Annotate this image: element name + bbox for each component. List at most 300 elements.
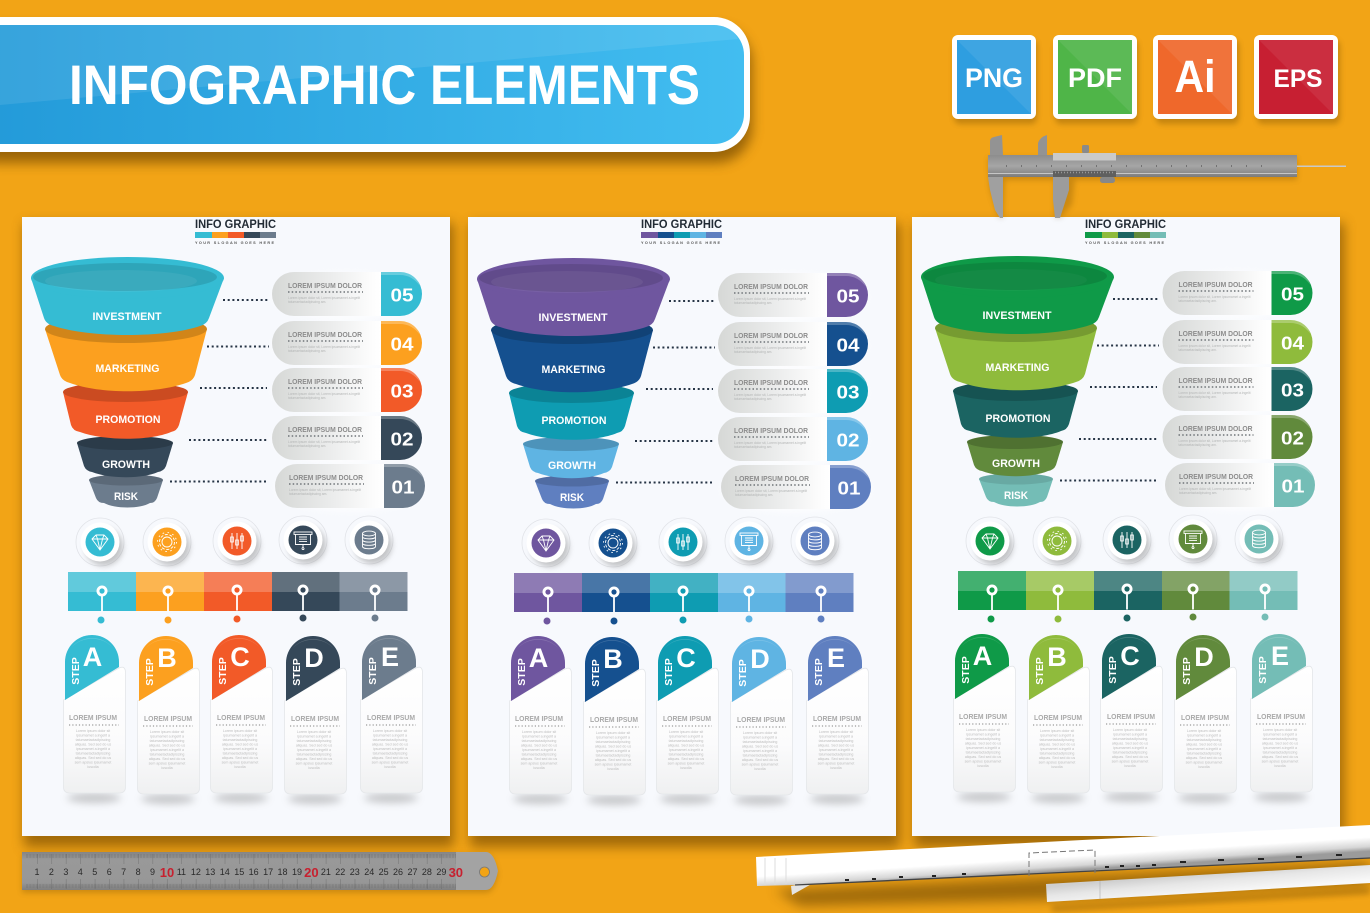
funnel layer: investment xyxy=(477,258,670,336)
icon: diamond xyxy=(522,519,570,567)
funnel layer: risk xyxy=(89,474,163,508)
step card B: Lorem ipsum dolor sit xyxy=(1040,729,1074,733)
funnel layer: growth: GROWTH xyxy=(102,459,150,471)
step card B: ipsumamet a.ingelit a xyxy=(596,749,630,753)
funnel layer: risk: RISK xyxy=(1004,490,1028,502)
step card B xyxy=(138,636,200,804)
label pill 05 xyxy=(272,272,422,320)
sheet title: INFO GRAPHIC xyxy=(1085,217,1166,231)
label pill 02: tatumaetactadipiscing am. xyxy=(288,444,326,448)
step card E: sem apsius ipsumamet xyxy=(818,762,854,766)
step card E: sem apsius ipsumamet xyxy=(372,760,408,764)
step card E: ipsumamet a.ingelit a xyxy=(1263,732,1297,736)
label pill 02: 02 xyxy=(1281,428,1304,448)
step card B: aliquas. Sed sed do us xyxy=(1039,756,1075,760)
step card A: ipsumamet a.ingelit a xyxy=(522,748,556,752)
icon: coin stack xyxy=(791,517,839,565)
step card D: D xyxy=(1194,642,1214,672)
label pill 02 xyxy=(718,417,868,465)
step card E: STEP xyxy=(367,657,379,685)
step card B: LOREM IPSUM xyxy=(1034,713,1082,722)
ruler: 16 xyxy=(249,867,259,877)
step card E: ipsumamet a.ingelit a xyxy=(819,748,853,752)
step card C: aliquas. Sed sed do us xyxy=(222,756,258,760)
label pill 01: LOREM IPSUM DOLOR xyxy=(289,475,363,482)
label pill 03: Lorem ipsum dolor sit, Lorem ipsumamet a.ingelit xyxy=(1178,391,1251,395)
step card D xyxy=(1174,635,1236,803)
step card A xyxy=(510,636,572,804)
step card D: sem apsius ipsumamet xyxy=(742,762,778,766)
step card C: sem apsius ipsumamet xyxy=(1112,760,1148,764)
step card C: iuscdia xyxy=(680,766,692,770)
label pill 03: LOREM IPSUM DOLOR xyxy=(288,379,362,386)
step card D: STEP xyxy=(737,659,749,687)
badge: PDF xyxy=(1053,35,1138,124)
step card B: aliquas. Sed sed do us xyxy=(1039,742,1075,746)
funnel chart xyxy=(31,257,224,508)
dotted connectors xyxy=(170,300,269,482)
label pill 03: 03 xyxy=(390,382,414,402)
funnel layer: promotion xyxy=(953,381,1078,438)
step card A: STEP xyxy=(516,658,528,686)
icon: presentation board xyxy=(725,517,773,565)
step card A: ipsumamet a.ingelit a xyxy=(966,746,1000,750)
step card E: STEP xyxy=(813,658,825,686)
step card A: sem apsius ipsumamet xyxy=(521,762,557,766)
step card D: ipsumamet a.ingelit a xyxy=(743,749,777,753)
step card D: tatumaetactadipiscing xyxy=(297,752,331,756)
badge: EPS: EPS xyxy=(1274,65,1322,93)
funnel layer: growth xyxy=(967,435,1063,476)
funnel layer: investment xyxy=(31,257,224,335)
label pill 04: LOREM IPSUM DOLOR xyxy=(1178,331,1252,338)
step card D: tatumaetactadipiscing xyxy=(743,740,777,744)
ruler: 29 xyxy=(436,867,446,877)
label pill 01: LOREM IPSUM DOLOR xyxy=(1179,474,1253,481)
ruler: 25 xyxy=(379,867,389,877)
step card E: Lorem ipsum dolor sit xyxy=(819,730,853,734)
ruler: 17 xyxy=(263,867,273,877)
step card A: LOREM IPSUM xyxy=(959,712,1007,721)
step card D: aliquas. Sed sed do us xyxy=(742,744,778,748)
step card A: iuscdia xyxy=(977,764,989,768)
step card B: aliquas. Sed sed do us xyxy=(595,758,631,762)
step card D: ipsumamet a.ingelit a xyxy=(297,734,331,738)
label pill 03: tatumaetactadipiscing am. xyxy=(288,396,326,400)
badge: PDF: PDF xyxy=(1068,63,1122,93)
ruler: 22 xyxy=(335,867,345,877)
sheet title: INFO GRAPHIC xyxy=(641,217,722,231)
step card C: ipsumamet a.ingelit a xyxy=(223,734,257,738)
icon: presentation board xyxy=(1169,515,1217,563)
step card B: iuscdia xyxy=(607,767,619,771)
label pill 04: Lorem ipsum dolor sit, Lorem ipsumamet a.ingelit xyxy=(1178,344,1251,348)
step card E: E xyxy=(827,643,845,673)
step card B: Lorem ipsum dolor sit xyxy=(596,731,630,735)
step card C: ipsumamet a.ingelit a xyxy=(223,747,257,751)
step card A: aliquas. Sed sed do us xyxy=(521,744,557,748)
step card A: A xyxy=(529,643,548,673)
sheet title xyxy=(641,217,722,245)
ruler: 13 xyxy=(205,867,215,877)
ruler: 21 xyxy=(321,867,331,877)
step card C: LOREM IPSUM xyxy=(663,714,711,723)
label pill 05: LOREM IPSUM DOLOR xyxy=(288,283,362,290)
step card E: aliquas. Sed sed do us xyxy=(372,756,408,760)
step card C: LOREM IPSUM xyxy=(1107,712,1155,721)
step card E: sem apsius ipsumamet xyxy=(1262,760,1298,764)
funnel layer: growth xyxy=(77,436,173,477)
step card E: tatumaetactadipiscing xyxy=(1263,737,1297,741)
step card B: tatumaetactadipiscing xyxy=(596,754,630,758)
label pill 02: tatumaetactadipiscing am. xyxy=(1178,443,1217,447)
step card C: tatumaetactadipiscing xyxy=(1113,737,1147,741)
funnel layer: growth xyxy=(523,437,619,478)
step card D: aliquas. Sed sed do us xyxy=(296,757,332,761)
label pill 04: Lorem ipsum dolor sit, Lorem ipsumamet a.ingelit xyxy=(734,346,806,350)
step card E: ipsumamet a.ingelit a xyxy=(1263,746,1297,750)
panel: right funnel sheet xyxy=(912,217,1344,847)
label pill 01 xyxy=(1165,463,1315,511)
step card A: aliquas. Sed sed do us xyxy=(965,755,1001,759)
label pill 05: 05 xyxy=(390,286,414,306)
step card D: ipsumamet a.ingelit a xyxy=(1187,734,1221,738)
label pill 01: 01 xyxy=(838,478,860,498)
label pill 02: tatumaetactadipiscing am. xyxy=(734,445,772,449)
step card B: sem apsius ipsumamet xyxy=(595,762,631,766)
label pill 02: Lorem ipsum dolor sit, Lorem ipsumamet a.ingelit xyxy=(1178,439,1251,443)
step card B xyxy=(1028,635,1090,803)
step card D: D xyxy=(750,644,770,674)
step card B: iuscdia xyxy=(1051,765,1063,769)
label pill 05: Lorem ipsum dolor sit, Lorem ipsumamet a.ingelit xyxy=(1178,295,1251,299)
funnel layer: promotion xyxy=(63,382,188,439)
step card D: aliquas. Sed sed do us xyxy=(742,758,778,762)
step card E: LOREM IPSUM xyxy=(1257,712,1305,721)
sheet title: YOUR SLOGAN GOES HERE xyxy=(195,241,274,245)
step card A: LOREM IPSUM xyxy=(515,714,563,723)
step card C: aliquas. Sed sed do us xyxy=(222,742,258,746)
step card A: A xyxy=(83,642,102,672)
label pill 01: 01 xyxy=(392,478,414,498)
step card E: iuscdia xyxy=(1274,764,1286,768)
step card C: tatumaetactadipiscing xyxy=(1113,750,1147,754)
step card C: aliquas. Sed sed do us xyxy=(1112,742,1148,746)
step card A: ipsumamet a.ingelit a xyxy=(76,734,110,738)
ruler: 10 xyxy=(160,865,174,880)
sheet title xyxy=(195,217,276,245)
ruler: 26 xyxy=(393,867,403,877)
step card E: aliquas. Sed sed do us xyxy=(372,742,408,746)
step card C: iuscdia xyxy=(1124,764,1136,768)
label pill 02: LOREM IPSUM DOLOR xyxy=(1178,426,1252,433)
step card E xyxy=(1250,634,1312,802)
rolled paper xyxy=(756,825,1370,912)
step card C: C xyxy=(1120,641,1140,671)
step card E: tatumaetactadipiscing xyxy=(373,752,407,756)
label pill 02 xyxy=(1162,415,1312,463)
label pill 05: tatumaetactadipiscing am. xyxy=(734,301,772,305)
step card E: E xyxy=(381,642,399,672)
label pill 04 xyxy=(272,321,422,369)
dotted connectors xyxy=(1060,299,1159,480)
step card C: STEP xyxy=(663,658,675,686)
funnel layer: promotion: PROMOTION xyxy=(96,414,161,426)
label pill 05: Lorem ipsum dolor sit, Lorem ipsumamet a.ingelit xyxy=(288,296,360,300)
timeline bar xyxy=(514,573,854,624)
label pill 05: 05 xyxy=(836,286,860,306)
step card E: STEP xyxy=(1257,656,1269,684)
step card E: tatumaetactadipiscing xyxy=(373,738,407,742)
label pill 01: tatumaetactadipiscing am. xyxy=(1179,491,1217,495)
ruler: 2 xyxy=(49,867,54,877)
timeline bar xyxy=(958,571,1298,622)
label pill 01: Lorem ipsum dolor sit, Lorem ipsumamet a.ingelit xyxy=(289,488,361,492)
step card A: sem apsius ipsumamet xyxy=(75,760,111,764)
step card D: tatumaetactadipiscing xyxy=(1187,752,1221,756)
funnel layer: investment: INVESTMENT xyxy=(982,310,1052,322)
label pill 03: 03 xyxy=(836,382,860,402)
step card A: ipsumamet a.ingelit a xyxy=(76,747,110,751)
caliper xyxy=(988,135,1346,218)
label pill 03 xyxy=(718,369,868,417)
label pill 05: tatumaetactadipiscing am. xyxy=(1178,299,1217,303)
label pill 04: tatumaetactadipiscing am. xyxy=(288,349,326,353)
badge: Ai xyxy=(1153,35,1239,124)
label pill 03: tatumaetactadipiscing am. xyxy=(734,397,772,401)
label pill 01 xyxy=(275,464,425,512)
panel: left funnel sheet xyxy=(22,217,454,847)
step card B: STEP xyxy=(1034,657,1046,685)
ruler: 4 xyxy=(78,867,83,877)
step card D: aliquas. Sed sed do us xyxy=(1186,756,1222,760)
step card E: LOREM IPSUM xyxy=(813,714,861,723)
funnel layer: promotion xyxy=(509,383,634,440)
step card E: ipsumamet a.ingelit a xyxy=(819,734,853,738)
label pill 04 xyxy=(718,322,868,370)
funnel layer: promotion: PROMOTION xyxy=(986,413,1051,425)
step card C: ipsumamet a.ingelit a xyxy=(1113,732,1147,736)
icon: coin stack xyxy=(345,516,393,564)
ruler: 1 xyxy=(34,867,40,877)
label pill 04: LOREM IPSUM DOLOR xyxy=(734,333,808,340)
step card D: Lorem ipsum dolor sit xyxy=(743,731,777,735)
step card C: tatumaetactadipiscing xyxy=(669,739,703,743)
step card E xyxy=(806,636,868,804)
label pill 01 xyxy=(721,465,871,513)
step card B: tatumaetactadipiscing xyxy=(150,739,184,743)
sheet title: YOUR SLOGAN GOES HERE xyxy=(1085,241,1164,245)
step card D: tatumaetactadipiscing xyxy=(1187,738,1221,742)
icon: diamond xyxy=(76,518,124,566)
step card D: D xyxy=(304,643,324,673)
step card A: ipsumamet a.ingelit a xyxy=(966,732,1000,736)
label pill 03 xyxy=(1162,367,1312,415)
step card E: ipsumamet a.ingelit a xyxy=(373,747,407,751)
funnel layer: marketing: MARKETING xyxy=(986,362,1050,374)
ruler: 24 xyxy=(364,867,374,877)
step card C: Lorem ipsum dolor sit xyxy=(223,729,257,733)
step card D: STEP xyxy=(1181,657,1193,685)
step card D: Lorem ipsum dolor sit xyxy=(297,730,331,734)
step card B: Lorem ipsum dolor sit xyxy=(150,730,184,734)
step card E: aliquas. Sed sed do us xyxy=(818,757,854,761)
label pill 02: Lorem ipsum dolor sit, Lorem ipsumamet a.ingelit xyxy=(288,440,360,444)
heading: infographic elements: INFOGRAPHIC ELEMENTS xyxy=(69,53,700,116)
step card E: tatumaetactadipiscing xyxy=(819,739,853,743)
funnel chart xyxy=(477,258,670,508)
ruler: 12 xyxy=(191,867,201,877)
header banner xyxy=(0,17,752,163)
label pill 04: Lorem ipsum dolor sit, Lorem ipsumamet a.ingelit xyxy=(288,345,360,349)
step card C: Lorem ipsum dolor sit xyxy=(1113,728,1147,732)
step card A: iuscdia xyxy=(533,766,545,770)
step card B: ipsumamet a.ingelit a xyxy=(150,748,184,752)
step card A: aliquas. Sed sed do us xyxy=(75,756,111,760)
sheet title: INFO GRAPHIC xyxy=(195,217,276,231)
step card C: C xyxy=(230,642,250,672)
step card D: tatumaetactadipiscing xyxy=(297,739,331,743)
step card B: tatumaetactadipiscing xyxy=(150,752,184,756)
step card A xyxy=(64,635,126,803)
label pill 05: 05 xyxy=(1281,284,1304,304)
step card B: B xyxy=(603,644,623,674)
label pill 04: 04 xyxy=(836,336,860,356)
dotted connectors xyxy=(616,301,715,482)
step card C: STEP xyxy=(217,657,229,685)
step card A: iuscdia xyxy=(87,765,99,769)
label pill 04: LOREM IPSUM DOLOR xyxy=(288,332,362,339)
panel: middle funnel sheet xyxy=(468,217,900,847)
funnel layer: marketing xyxy=(45,315,207,391)
label pill 03: Lorem ipsum dolor sit, Lorem ipsumamet a.ingelit xyxy=(288,392,360,396)
step card A: Lorem ipsum dolor sit xyxy=(522,730,556,734)
step card A: aliquas. Sed sed do us xyxy=(75,742,111,746)
step card E: E xyxy=(1271,641,1289,671)
step card B: ipsumamet a.ingelit a xyxy=(150,734,184,738)
label pill 02: 02 xyxy=(836,430,860,450)
funnel layer: marketing: MARKETING xyxy=(96,363,160,375)
step card A: ipsumamet a.ingelit a xyxy=(522,734,556,738)
step card C: aliquas. Sed sed do us xyxy=(668,744,704,748)
step card D: LOREM IPSUM xyxy=(737,715,785,724)
step card C: STEP xyxy=(1107,656,1119,684)
badge: EPS xyxy=(1254,35,1340,124)
step card C: tatumaetactadipiscing xyxy=(223,738,257,742)
funnel chart xyxy=(921,256,1114,506)
label pill 03: 03 xyxy=(1281,380,1304,400)
ruler: 8 xyxy=(136,867,141,877)
step card E: ipsumamet a.ingelit a xyxy=(373,734,407,738)
step card E: LOREM IPSUM xyxy=(367,713,415,722)
label pill 05: tatumaetactadipiscing am. xyxy=(288,300,326,304)
icon: gear xyxy=(143,518,191,566)
step card A: tatumaetactadipiscing xyxy=(966,750,1000,754)
step card B: B xyxy=(157,643,177,673)
step card C: aliquas. Sed sed do us xyxy=(1112,755,1148,759)
step card A: tatumaetactadipiscing xyxy=(76,752,110,756)
step card D: iuscdia xyxy=(754,767,766,771)
step card A: STEP xyxy=(960,656,972,684)
step card B: tatumaetactadipiscing xyxy=(596,740,630,744)
label pill 03: Lorem ipsum dolor sit, Lorem ipsumamet a.ingelit xyxy=(734,393,806,397)
funnel layer: marketing xyxy=(935,314,1097,390)
sheet title: YOUR SLOGAN GOES HERE xyxy=(641,241,720,245)
step card E: Lorem ipsum dolor sit xyxy=(1263,728,1297,732)
step card A: tatumaetactadipiscing xyxy=(522,752,556,756)
label pill 02: LOREM IPSUM DOLOR xyxy=(734,428,808,435)
step card B: sem apsius ipsumamet xyxy=(1039,760,1075,764)
badge: PNG xyxy=(952,35,1037,124)
step card B: ipsumamet a.ingelit a xyxy=(1040,734,1074,738)
step card B: aliquas. Sed sed do us xyxy=(149,757,185,761)
step card A: sem apsius ipsumamet xyxy=(965,760,1001,764)
label pill 01: tatumaetactadipiscing am. xyxy=(735,493,773,497)
icon: coin stack xyxy=(1235,515,1283,563)
step card D xyxy=(730,637,792,805)
step card A: Lorem ipsum dolor sit xyxy=(76,729,110,733)
sheet title xyxy=(1085,217,1166,245)
funnel layer: promotion: PROMOTION xyxy=(542,415,607,427)
ruler: 23 xyxy=(350,867,360,877)
label pill 05 xyxy=(718,273,868,321)
ruler: 9 xyxy=(150,867,155,877)
timeline bar xyxy=(68,572,408,624)
ruler: 19 xyxy=(292,867,302,877)
step card B: ipsumamet a.ingelit a xyxy=(1040,747,1074,751)
step card D: iuscdia xyxy=(1198,765,1210,769)
ruler: 30 xyxy=(449,865,463,880)
label pill 03: LOREM IPSUM DOLOR xyxy=(734,380,808,387)
step card D: STEP xyxy=(291,658,303,686)
label pill 02: 02 xyxy=(390,430,414,450)
step card B: LOREM IPSUM xyxy=(144,714,192,723)
step card C: C xyxy=(676,643,696,673)
step card B: tatumaetactadipiscing xyxy=(1040,752,1074,756)
step card D: ipsumamet a.ingelit a xyxy=(743,736,777,740)
funnel layer: investment xyxy=(921,256,1114,334)
label pill 02: LOREM IPSUM DOLOR xyxy=(288,427,362,434)
ruler: 11 xyxy=(177,867,186,877)
funnel layer: risk: RISK xyxy=(560,492,584,504)
step card D: LOREM IPSUM xyxy=(1181,713,1229,722)
ruler: 20 xyxy=(304,865,319,880)
label pill 01: Lorem ipsum dolor sit, Lorem ipsumamet a.ingelit xyxy=(1179,487,1251,491)
label pill 03: LOREM IPSUM DOLOR xyxy=(1178,378,1252,385)
step card C: iuscdia xyxy=(234,765,246,769)
step card A: LOREM IPSUM xyxy=(69,713,117,722)
ruler: 6 xyxy=(107,867,112,877)
step card C: sem apsius ipsumamet xyxy=(222,760,258,764)
funnel layer: risk: RISK xyxy=(114,491,138,503)
label pill 05: LOREM IPSUM DOLOR xyxy=(1178,282,1252,289)
step card C: aliquas. Sed sed do us xyxy=(668,757,704,761)
label pill 01: LOREM IPSUM DOLOR xyxy=(735,476,809,483)
step card D: ipsumamet a.ingelit a xyxy=(1187,747,1221,751)
step card E: tatumaetactadipiscing xyxy=(1263,750,1297,754)
step card C: sem apsius ipsumamet xyxy=(668,762,704,766)
step card A: tatumaetactadipiscing xyxy=(966,737,1000,741)
step card B: sem apsius ipsumamet xyxy=(149,762,185,766)
funnel layer: investment: INVESTMENT xyxy=(538,312,608,324)
step card D: tatumaetactadipiscing xyxy=(743,754,777,758)
ruler xyxy=(22,852,498,893)
label pill 04: tatumaetactadipiscing am. xyxy=(1178,348,1217,352)
step card A: A xyxy=(973,641,992,671)
icon: gear xyxy=(1033,517,1081,565)
step card C xyxy=(210,635,272,803)
step card D: ipsumamet a.ingelit a xyxy=(297,748,331,752)
